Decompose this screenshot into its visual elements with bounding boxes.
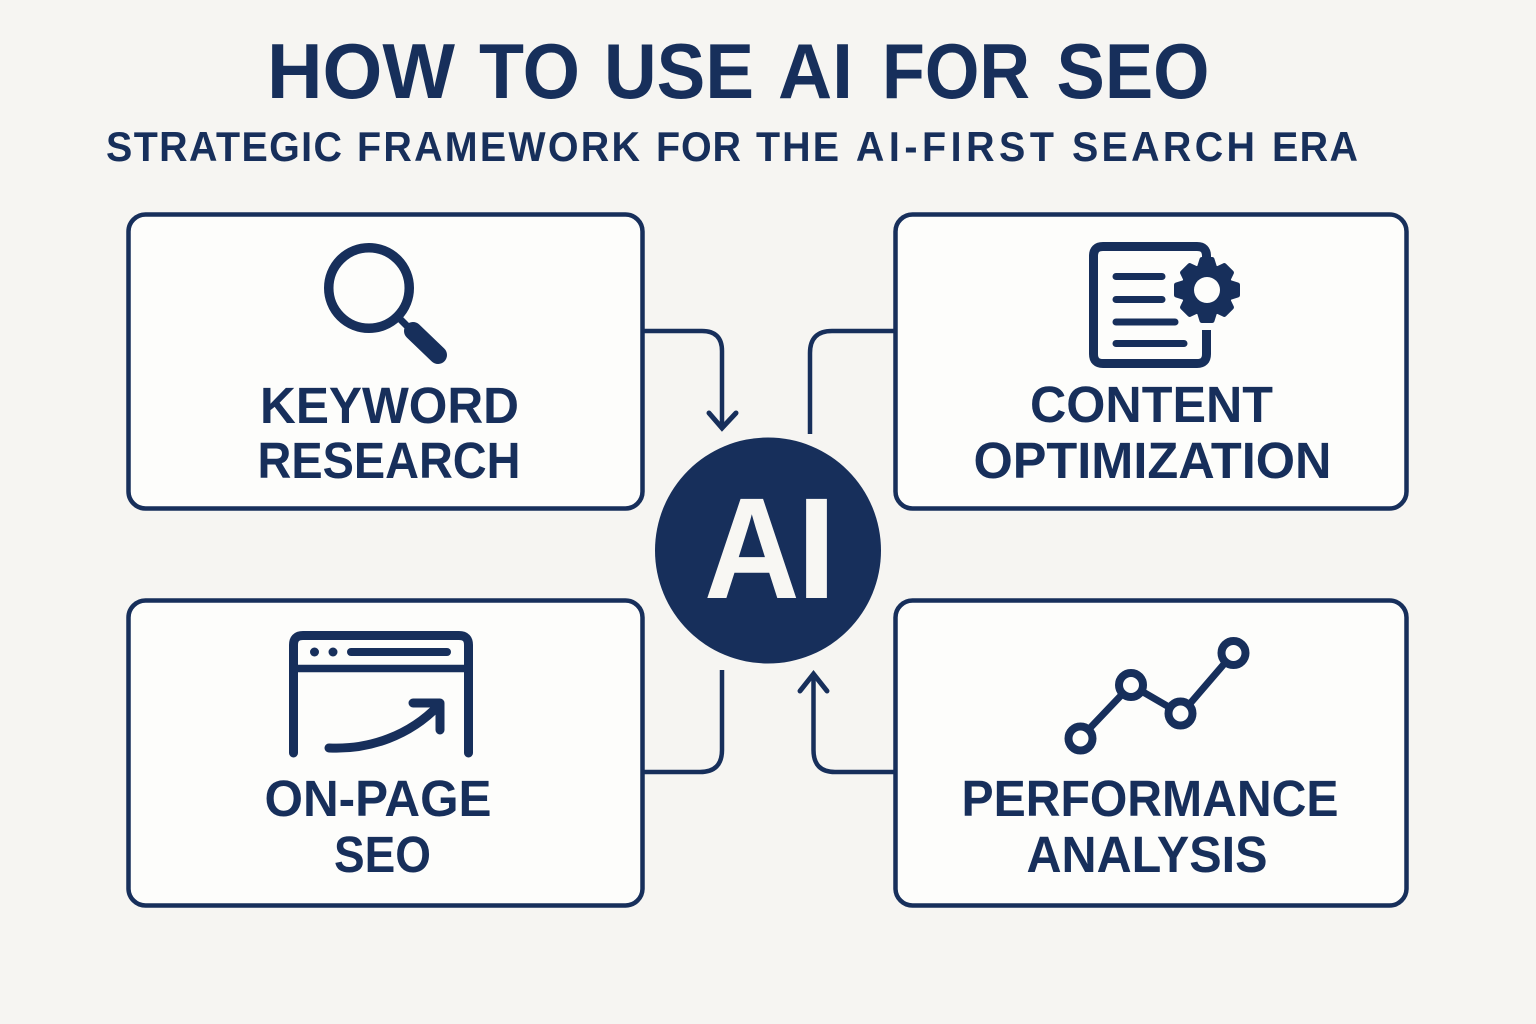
label: performance analysis: PERFORMANCE <box>962 770 1338 827</box>
title: SEO <box>1056 27 1210 115</box>
label: content optimization: OPTIMIZATION <box>974 432 1332 489</box>
label: on-page seo: ON-PAGE <box>264 770 492 827</box>
label: content optimization: CONTENT <box>1030 376 1273 433</box>
connector: AI to on-page seo <box>643 670 722 772</box>
connector: AI to content optimization <box>810 331 896 434</box>
icon: browser with arrow <box>294 636 468 753</box>
label: on-page seo: SEO <box>334 826 431 883</box>
arrow: performance analysis to AI <box>800 674 896 772</box>
label: keyword research: KEYWORD <box>260 377 519 434</box>
AI hub <box>655 438 881 664</box>
subtitle: FRAMEWORK <box>357 123 640 170</box>
label: performance analysis <box>962 770 1338 883</box>
title: FOR <box>882 27 1030 115</box>
title: HOW <box>267 27 455 115</box>
panel: keyword research <box>128 214 642 508</box>
title: USE <box>604 27 754 115</box>
label: content optimization <box>974 376 1332 489</box>
arrow: keyword research to AI <box>643 331 736 428</box>
title: TO <box>479 27 580 115</box>
panel: performance analysis <box>896 600 1406 906</box>
subtitle: THE <box>756 123 839 170</box>
title: AI <box>778 27 853 115</box>
subtitle: AI-FIRST <box>856 123 1054 170</box>
AI hub: I <box>796 468 837 629</box>
panel: on-page seo <box>128 600 642 906</box>
label: keyword research: RESEARCH <box>258 432 520 489</box>
label: keyword research <box>258 377 520 489</box>
icon: magnifying glass <box>329 248 438 355</box>
label: performance analysis: ANALYSIS <box>1026 826 1268 883</box>
subtitle: STRATEGIC <box>106 123 342 170</box>
panel: content optimization <box>896 214 1406 508</box>
subtitle: SEARCH <box>1072 123 1255 170</box>
subtitle: FOR <box>656 123 741 170</box>
icon: document with gear <box>1094 246 1240 364</box>
icon: line chart <box>1068 641 1246 750</box>
subtitle: ERA <box>1272 123 1358 170</box>
AI hub: A <box>704 469 800 629</box>
label: on-page seo <box>264 770 492 883</box>
